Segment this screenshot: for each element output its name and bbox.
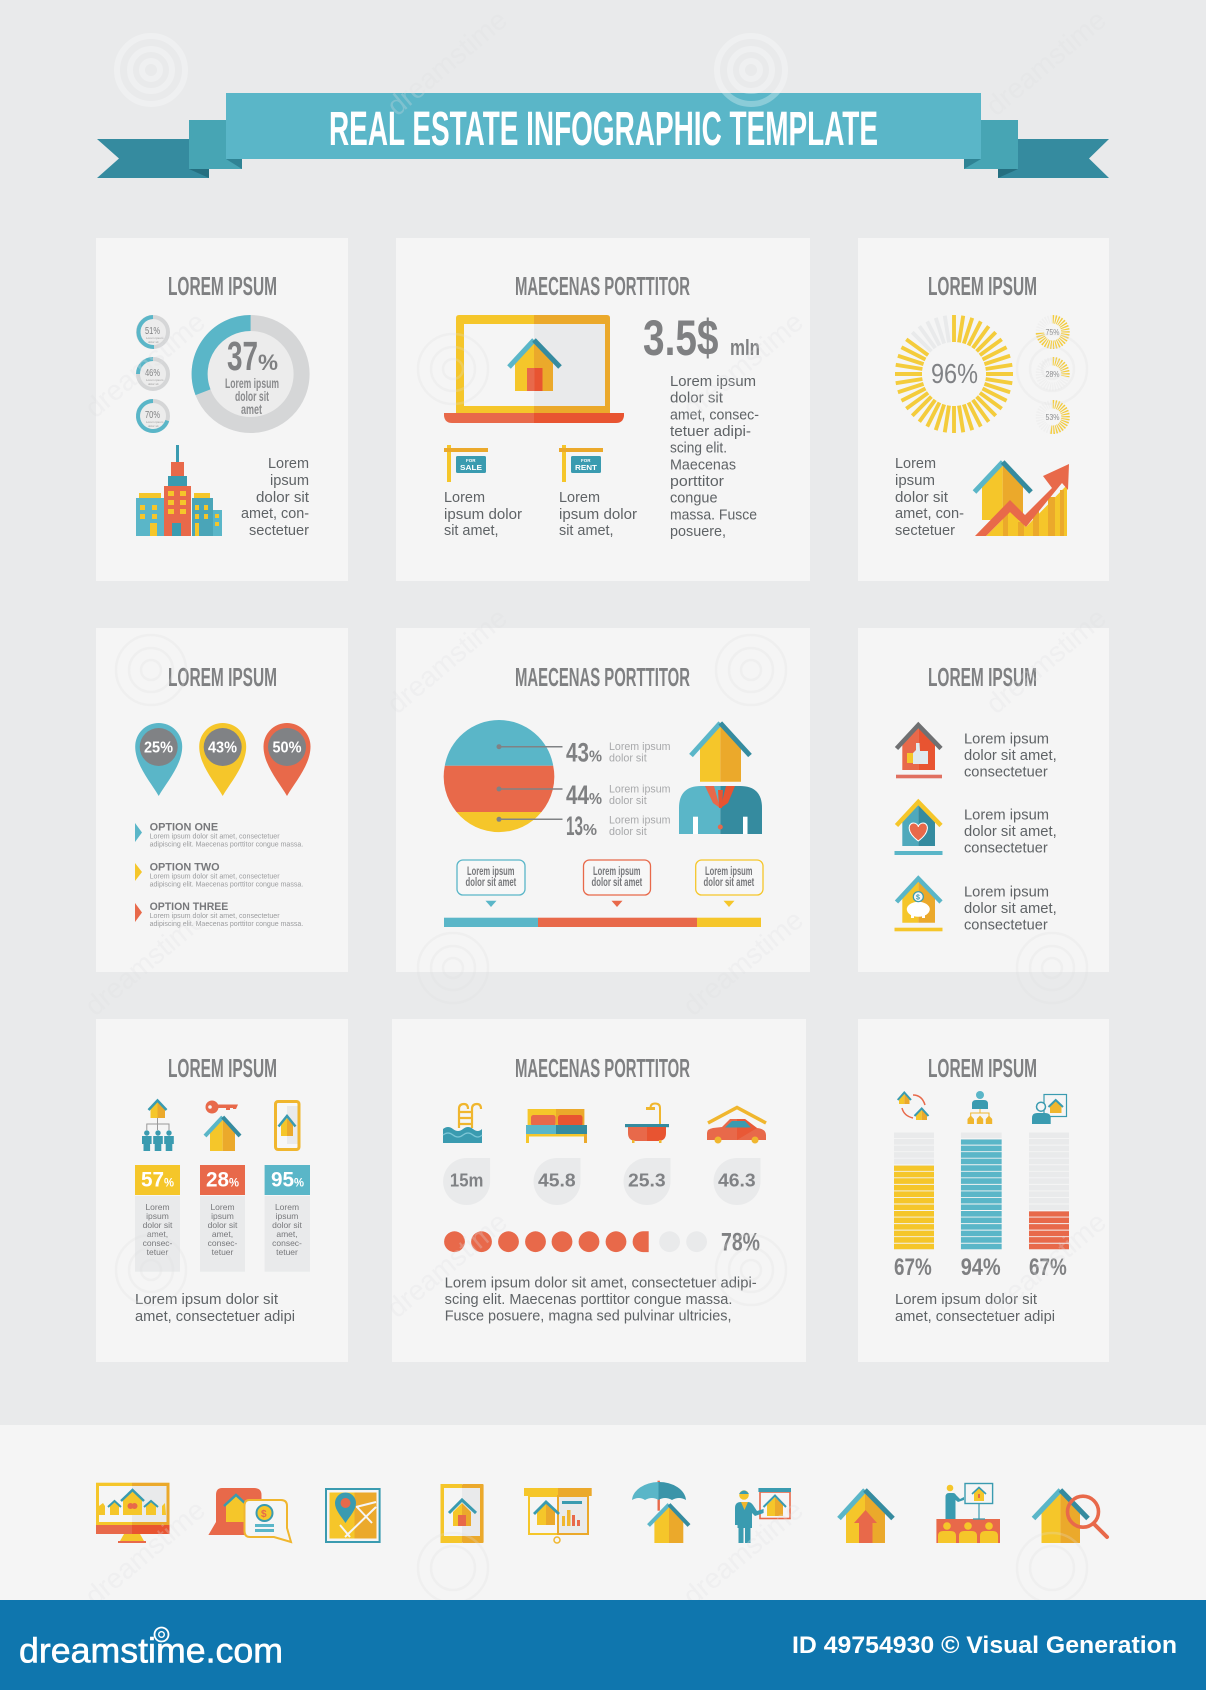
radial tick chart 96% [895,315,1013,433]
icon: map with pin [326,1489,380,1542]
text block: sit amet, [444,523,498,539]
icon: speaker with audience [936,1484,1000,1543]
drop stat 25.3: 25.3 [628,1171,666,1191]
option one: Lorem ipsum dolor sit amet, consectetuer [150,834,280,841]
text block: amet, con- [241,506,309,522]
icon: house with piggy bank: $ [916,894,920,902]
icon: speech bubbles [208,1488,291,1542]
text block [964,884,1057,934]
text block: dolor sit amet, [964,748,1057,764]
small radial 53%: 53% [1046,413,1060,422]
pie label 43% [496,738,670,768]
radial tick chart 96%: 96% [931,358,978,389]
icon: car in garage [707,1108,766,1144]
text block: Fusce posuere, magna sed pulvinar ultricies, [445,1309,732,1325]
text block: ipsum [895,473,935,489]
text block: Lorem ipsum [964,807,1049,823]
stat card 28%: consec- [208,1238,238,1248]
watermark: dreamstime [677,904,809,1022]
icon: pool [443,1104,482,1143]
text block: Lorem ipsum dolor sit [895,1292,1037,1308]
pie label 44%: Lorem ipsum [609,783,670,795]
icon: manager and houses [968,1091,992,1124]
bar chart yellow 67%: 67% [894,1254,932,1281]
big donut 37% [200,323,302,425]
footer logo: dreamstime.com [19,1632,283,1671]
heading: LOREM IPSUM [928,271,1037,301]
watermark: dreamstime [79,306,211,424]
big donut 37%: % [258,350,278,375]
heading: LOREM IPSUM [168,662,277,692]
icon: presentation board [524,1488,592,1543]
watermark: dreamstime [980,4,1112,122]
text block: dolor sit amet, [964,901,1057,917]
watermark: dreamstime [79,904,211,1022]
dot rating 78%: 78% [721,1229,760,1257]
drop stat 25.3 [624,1158,670,1205]
watermark: dreamstime [381,4,513,122]
heading: MAECENAS PORTTITOR [515,662,690,692]
icon: agent and picture [1032,1094,1066,1124]
stat card 28%: % [229,1176,239,1190]
option two: OPTION TWO [150,861,220,873]
text block: ipsum dolor [559,507,637,523]
stat card 95%: dolor sit [272,1220,303,1230]
text block: amet, con- [895,506,964,522]
option one: adipiscing elit. Maecenas porttitor congue massa. [150,842,303,849]
stat card 95%: amet, [276,1229,298,1239]
text block: Lorem [444,490,485,506]
text block [135,1292,295,1325]
icon: house with magnifier [1034,1490,1107,1543]
stat card 95% [265,1165,310,1272]
panel: radial progress [858,238,1109,581]
big donut 37%: Lorem ipsum [225,375,279,391]
icon: house with rising chart [974,462,1069,536]
pin 25%: 25% [144,740,173,757]
text block [964,807,1057,857]
text block: porttitor [670,474,724,490]
text block: amet, consectetuer adipi [895,1309,1055,1325]
stat card 28%: ipsum [211,1211,234,1221]
heading: LOREM IPSUM [168,1053,277,1083]
dot rating 78% [444,1229,760,1257]
text block [559,490,637,539]
icon: buildings [136,445,222,536]
panel: buildings stats [96,238,348,581]
text block: congue [670,491,718,507]
callout blue [457,860,525,907]
icon: phone with house [276,1102,299,1150]
stat card 28%: Lorem [210,1202,235,1212]
text block: Lorem ipsum dolor sit [135,1292,278,1308]
watermark: dreamstime [381,1206,513,1324]
drop stat 46.3 [714,1158,760,1205]
callout blue: dolor sit amet [466,877,516,889]
icon: umbrella and house [632,1481,689,1543]
big donut 37%: 37 [227,333,258,379]
drop stat 15m: 15m [450,1171,483,1191]
small donut 51% [138,317,168,347]
option three [135,901,303,928]
text block: dolor sit [256,490,309,506]
drop stat 46.3: 46.3 [718,1171,756,1191]
text block: sectetuer [895,523,955,539]
pie label 44% [496,780,670,810]
small donut 51%: 51% [145,326,160,337]
icon: for rent sign: RENT [575,463,597,472]
pie chart [444,720,554,832]
text block [670,374,759,540]
icon: monitor with houses [96,1483,170,1543]
icon: key and house [205,1100,240,1151]
small donut 70%: dolor sit [148,424,159,428]
stat card 28%: tetuer [212,1247,234,1257]
icon: house over team [142,1100,174,1151]
icon: house with piggy bank [894,878,942,931]
icon: for rent sign: FOR [581,458,591,463]
text block [895,456,964,539]
text block: consectetuer [964,841,1048,857]
text block: ipsum dolor [444,507,522,523]
big donut 37%: amet [241,401,262,417]
pie label 44%: 44 [566,780,589,810]
watermark: dreamstime [980,602,1112,720]
icon: for sale sign [444,445,488,482]
small donut 70%: Lorem ipsum [146,420,164,424]
pie label 43%: Lorem ipsum [609,741,670,753]
text block: posuere, [670,524,726,540]
icon: for sale sign: FOR [466,458,476,463]
text block: ipsum [270,473,309,489]
stat card 57% [135,1165,180,1272]
icon: agent with house head [679,723,762,834]
stat card 57%: dolor sit [143,1220,173,1230]
bar chart blue 94%: 94% [961,1254,1001,1281]
panel: three percent cards [96,1019,348,1362]
stat card 95%: consec- [272,1238,302,1248]
text block [444,490,522,539]
small donut 46% [138,359,168,389]
stat card 57%: % [164,1176,174,1190]
text block: amet, consectetuer adipi [135,1309,295,1325]
text block: Lorem [268,456,309,472]
icon: house exchange [898,1092,928,1120]
heading: LOREM IPSUM [168,271,277,301]
text block: Lorem ipsum dolor sit amet, consectetuer adipi- [445,1275,757,1291]
option one: OPTION ONE [150,822,218,834]
small donut 51%: Lorem ipsum [146,336,164,340]
stat card 95%: % [294,1176,304,1190]
small radial 28%: 28% [1046,370,1060,379]
stat card 57%: ipsum [146,1211,169,1221]
stat card 95%: ipsum [276,1211,298,1221]
big figure: mln [730,335,760,360]
small donut 70%: 70% [145,410,160,421]
panel: house list [858,628,1109,972]
icon: house with up arrow [839,1490,893,1543]
small donut 46%: dolor sit [148,382,159,386]
heading: MAECENAS PORTTITOR [515,271,690,301]
text block: sectetuer [249,523,309,539]
drop stat 45.8 [534,1158,580,1205]
callout yellow: dolor sit amet [704,877,754,889]
callout red [584,860,650,907]
panel: location pins [96,628,348,972]
pie label 13% [496,811,670,841]
callout red: dolor sit amet [592,877,642,889]
footer credit: ID 49754930 © Visual Generation [792,1632,1177,1659]
text block [241,456,309,539]
icon: agent with picture [735,1488,791,1543]
watermark: dreamstime [677,1494,809,1612]
icon: for rent sign [559,445,603,482]
option two: adipiscing elit. Maecenas porttitor congue massa. [150,881,303,888]
small radial 28% [1040,361,1065,387]
icon strip [0,1425,1206,1600]
small donut 51%: dolor sit [148,340,159,344]
text block: amet, consec- [670,407,759,423]
stat card 57%: 57 [141,1169,164,1192]
pie label 13%: Lorem ipsum [609,814,670,826]
icon: for sale sign: SALE [460,463,482,472]
text block: scing elit. [670,441,727,457]
small donut 46%: 46% [145,368,160,379]
callout blue: Lorem ipsum [467,866,514,878]
heading: MAECENAS PORTTITOR [515,1053,690,1083]
stat card 95%: 95 [271,1169,294,1192]
text block: Maecenas [670,457,736,473]
pin 50% [264,723,310,796]
pin 43% [199,723,246,796]
icon: laptop with house [444,315,624,423]
small donut 70% [138,401,168,431]
text block [964,731,1057,781]
icon: house with heart [894,802,942,855]
pie label 43%: 43 [566,738,589,768]
icon: tablet with house [440,1484,484,1543]
pin 43%: 43% [208,740,237,757]
option two [135,861,303,888]
stat card 28%: 28 [206,1169,229,1192]
text block: dolor sit [670,391,723,407]
text block: scing elit. Maecenas porttitor congue massa. [445,1292,732,1308]
title banner [97,93,1109,178]
stat card 95%: tetuer [276,1247,298,1257]
text block: dolor sit amet, [964,824,1057,840]
icon: bathtub [625,1104,669,1143]
pin 25% [135,723,182,796]
panel: amenities [392,1019,806,1362]
panel: pie chart and agent [396,628,810,972]
stat card 95%: Lorem [275,1202,299,1212]
heading: LOREM IPSUM [928,1053,1037,1083]
drop stat 15m [443,1158,490,1205]
big donut 37%: dolor sit [235,388,269,404]
option three: Lorem ipsum dolor sit amet, consectetuer [150,913,280,920]
text block [445,1275,757,1325]
stacked bar [444,918,761,927]
bar chart red 67%: 67% [1029,1254,1067,1281]
stat card 57%: tetuer [147,1247,169,1257]
callout yellow [696,860,763,907]
watermark: dreamstime [980,1206,1112,1324]
pie label 43%: dolor sit [609,753,647,765]
pie label 44%: % [589,791,602,808]
pie label 13%: 13 [566,811,583,841]
drop stat 45.8: 45.8 [538,1171,576,1191]
option three: OPTION THREE [150,901,228,913]
text block: Lorem ipsum [964,731,1049,747]
small radial 75%: 75% [1046,328,1060,337]
text block: dolor sit [895,490,948,506]
option two: Lorem ipsum dolor sit amet, consectetuer [150,873,280,880]
pie label 13%: dolor sit [609,826,647,838]
pie label 13%: % [583,822,597,839]
small radial 53% [1040,404,1066,430]
text block: sit amet, [559,523,614,539]
text block: Lorem ipsum [964,884,1049,900]
option one [135,822,303,849]
small radial 75% [1040,319,1065,345]
text block: massa. Fusce [670,507,757,523]
text block: consectetuer [964,918,1048,934]
stat card 28%: dolor sit [208,1220,238,1230]
text block: tetuer adipi- [670,424,751,440]
pie label 43%: % [589,749,602,766]
pin 50%: 50% [272,740,302,757]
callout red: Lorem ipsum [593,866,640,878]
callout yellow: Lorem ipsum [705,866,752,878]
stat card 57%: Lorem [145,1202,170,1212]
watermark: dreamstime [381,602,513,720]
footer bar [0,1600,1206,1690]
big figure: 3.5$ [643,310,719,366]
pie label 44%: dolor sit [609,795,647,807]
stat card 28% [200,1165,245,1272]
panel: segmented bars [858,1019,1109,1362]
panel: laptop listing [396,238,810,581]
small donut 46%: Lorem ipsum [146,378,164,382]
icon: house with thumb [896,725,942,778]
text block: consectetuer [964,765,1048,781]
text block: Lorem [895,456,936,472]
text block: Lorem [559,490,600,506]
text block: Lorem ipsum [670,374,756,390]
watermark: dreamstime [79,1494,211,1612]
text block [895,1292,1055,1325]
heading: LOREM IPSUM [928,662,1037,692]
watermark: dreamstime [677,306,809,424]
stat card 57%: amet, [147,1229,168,1239]
icon: speech bubbles: $ [261,1509,267,1520]
option three: adipiscing elit. Maecenas porttitor congue massa. [150,921,303,928]
stat card 57%: consec- [143,1238,173,1248]
icon: bed [526,1109,587,1143]
stat card 28%: amet, [212,1229,233,1239]
